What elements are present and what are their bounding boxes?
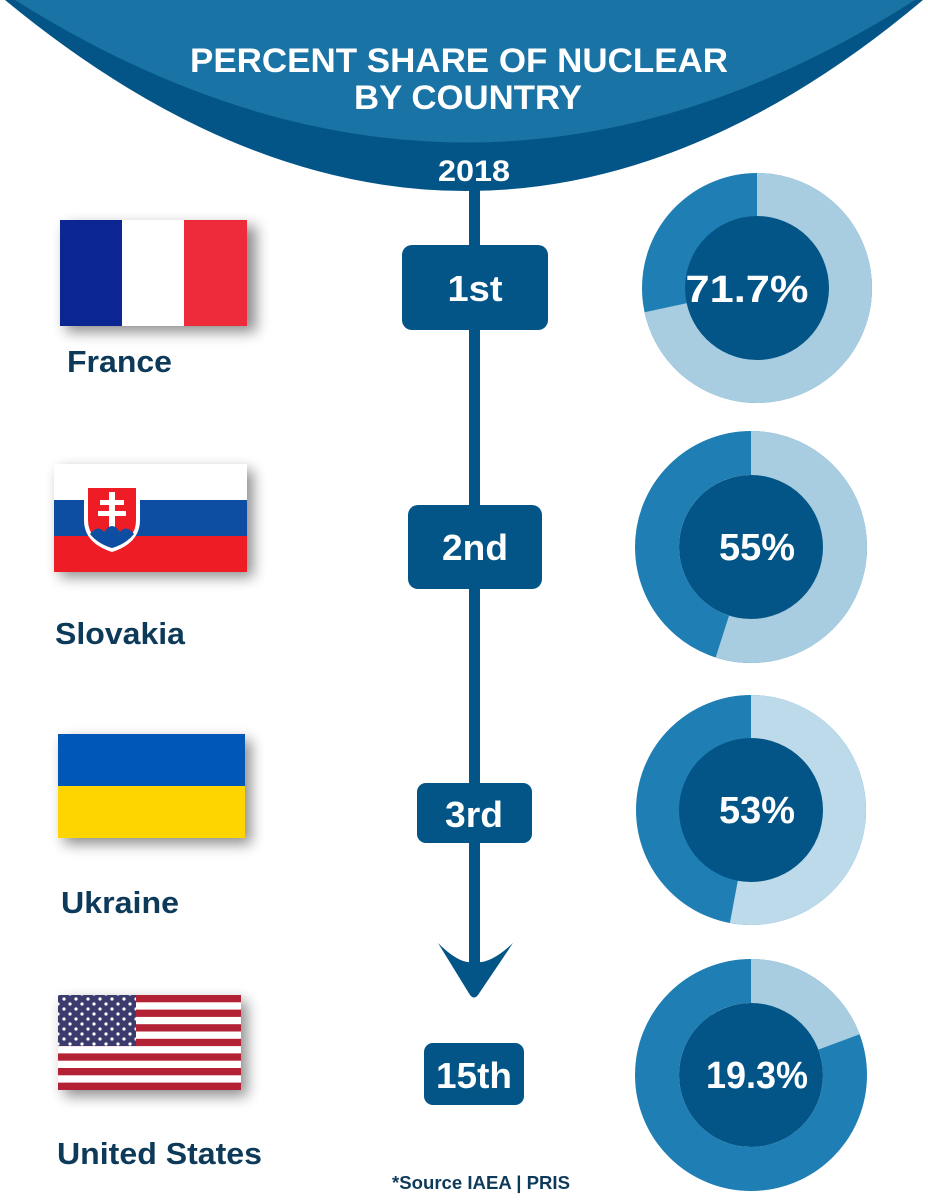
rank badges: 2nd bbox=[442, 527, 508, 568]
country labels: Slovakia bbox=[55, 616, 186, 651]
donut: Ukraine 53% bbox=[658, 717, 844, 903]
country labels: United States bbox=[57, 1136, 262, 1171]
country labels: France bbox=[67, 344, 172, 379]
donut: Ukraine 53%: 53% bbox=[719, 790, 795, 832]
year label: 2018 bbox=[438, 155, 510, 188]
rank badges: 15th bbox=[436, 1055, 512, 1096]
title: PERCENT SHARE OF NUCLEAR bbox=[190, 42, 728, 80]
donut: Slovakia 55% bbox=[657, 453, 845, 641]
donut: Slovakia 55%: 55% bbox=[719, 527, 795, 569]
header banner: BY COUNTRY bbox=[354, 79, 582, 117]
flag: France bbox=[60, 220, 256, 332]
donut: United States 19.3% bbox=[657, 981, 845, 1169]
country labels bbox=[55, 344, 262, 1171]
donut: France 71.7% bbox=[664, 195, 850, 381]
header banner bbox=[5, 0, 923, 191]
rank badges: 3rd bbox=[445, 794, 503, 835]
rank badges bbox=[402, 245, 548, 1105]
rank badges: 1st bbox=[448, 268, 503, 309]
arrow: timeline bbox=[438, 188, 513, 998]
flag: United States bbox=[58, 995, 247, 1096]
source note: *Source IAEA | PRIS bbox=[392, 1173, 570, 1193]
flag: Slovakia bbox=[54, 464, 253, 577]
donut: France 71.7%: 71.7% bbox=[686, 269, 808, 311]
country labels: Ukraine bbox=[61, 885, 179, 920]
flag: Ukraine bbox=[58, 734, 251, 844]
donut: United States 19.3%: 19.3% bbox=[706, 1055, 808, 1097]
